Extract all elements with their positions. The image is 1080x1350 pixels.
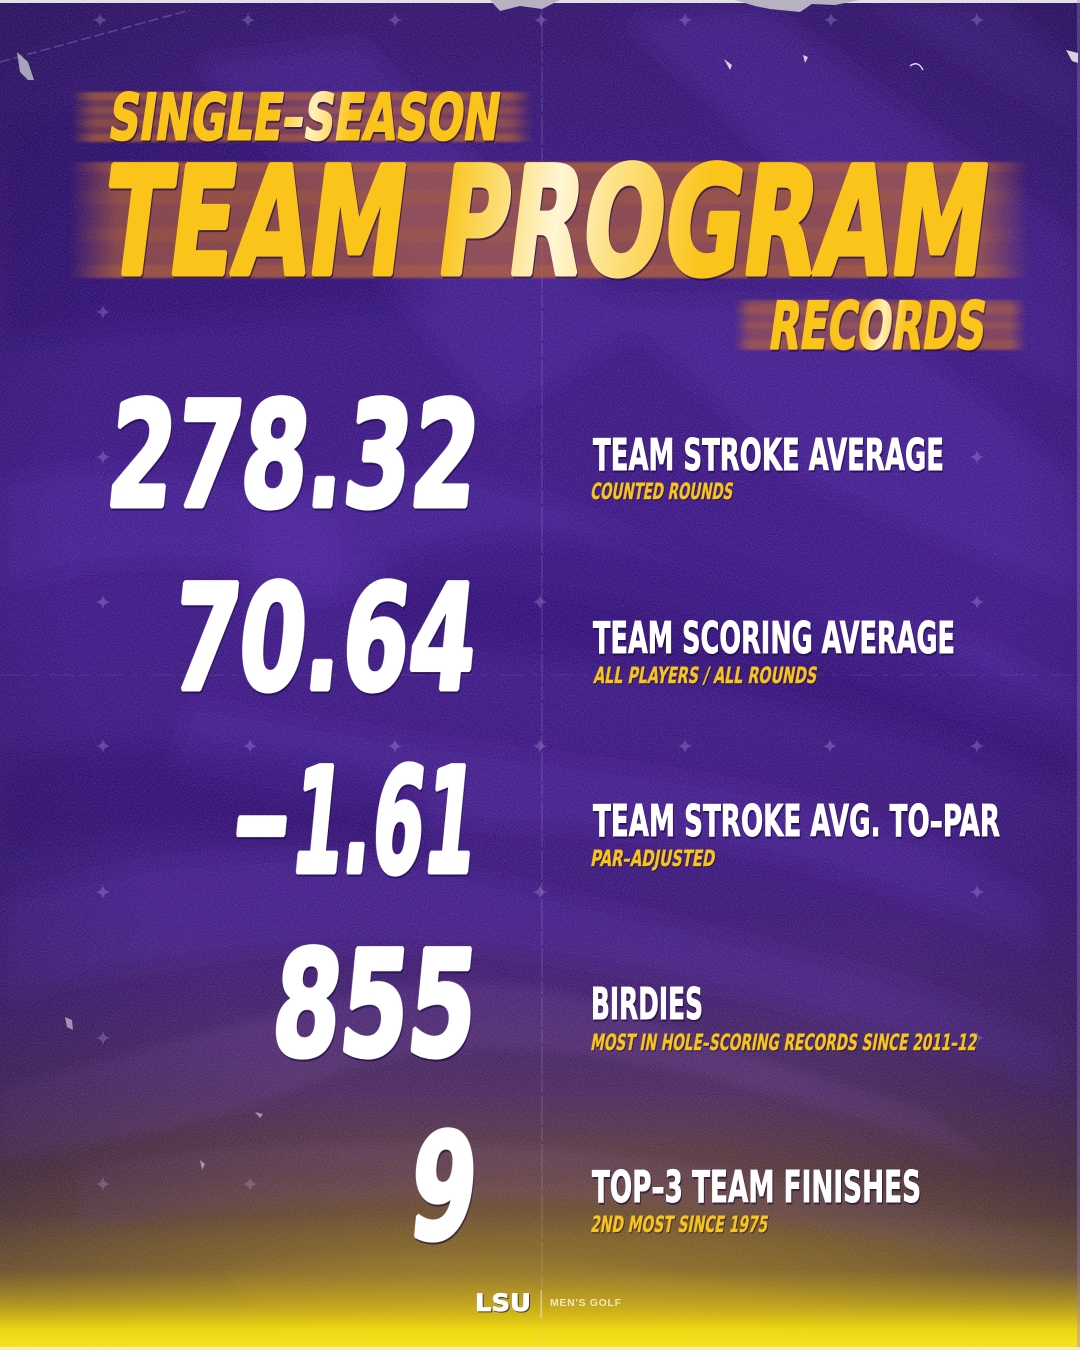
men's golf wordmark: MEN'S GOLF: [550, 1297, 622, 1309]
heading line: single-season: SINGLE–SEASON: [105, 81, 505, 155]
value: 278.32: [101, 370, 487, 541]
logo divider: [540, 1290, 542, 1318]
note: ALL PLAYERS / ALL ROUNDS: [592, 664, 819, 689]
value: −1.61: [223, 736, 485, 907]
note: COUNTED ROUNDS: [589, 480, 735, 505]
star pattern: [93, 13, 984, 1191]
title: [95, 81, 999, 364]
heading streaks: [70, 92, 1028, 350]
value: 70.64: [165, 553, 485, 724]
LSU wordmark: LSU: [475, 1289, 531, 1317]
value: 9: [403, 1102, 485, 1273]
record: team stroke average to par: [223, 736, 1000, 907]
note: 2ND MOST SINCE 1975: [589, 1213, 770, 1238]
value: 855: [266, 919, 485, 1090]
record: top-3 team finishes: [403, 1102, 921, 1273]
record: team stroke average: [101, 370, 944, 541]
footer logo: LSU men's golf: [475, 1289, 622, 1318]
record: team scoring average: [165, 553, 955, 724]
note: PAR–ADJUSTED: [589, 847, 717, 872]
label: BIRDIES: [591, 979, 703, 1030]
record: birdies: [266, 919, 979, 1090]
